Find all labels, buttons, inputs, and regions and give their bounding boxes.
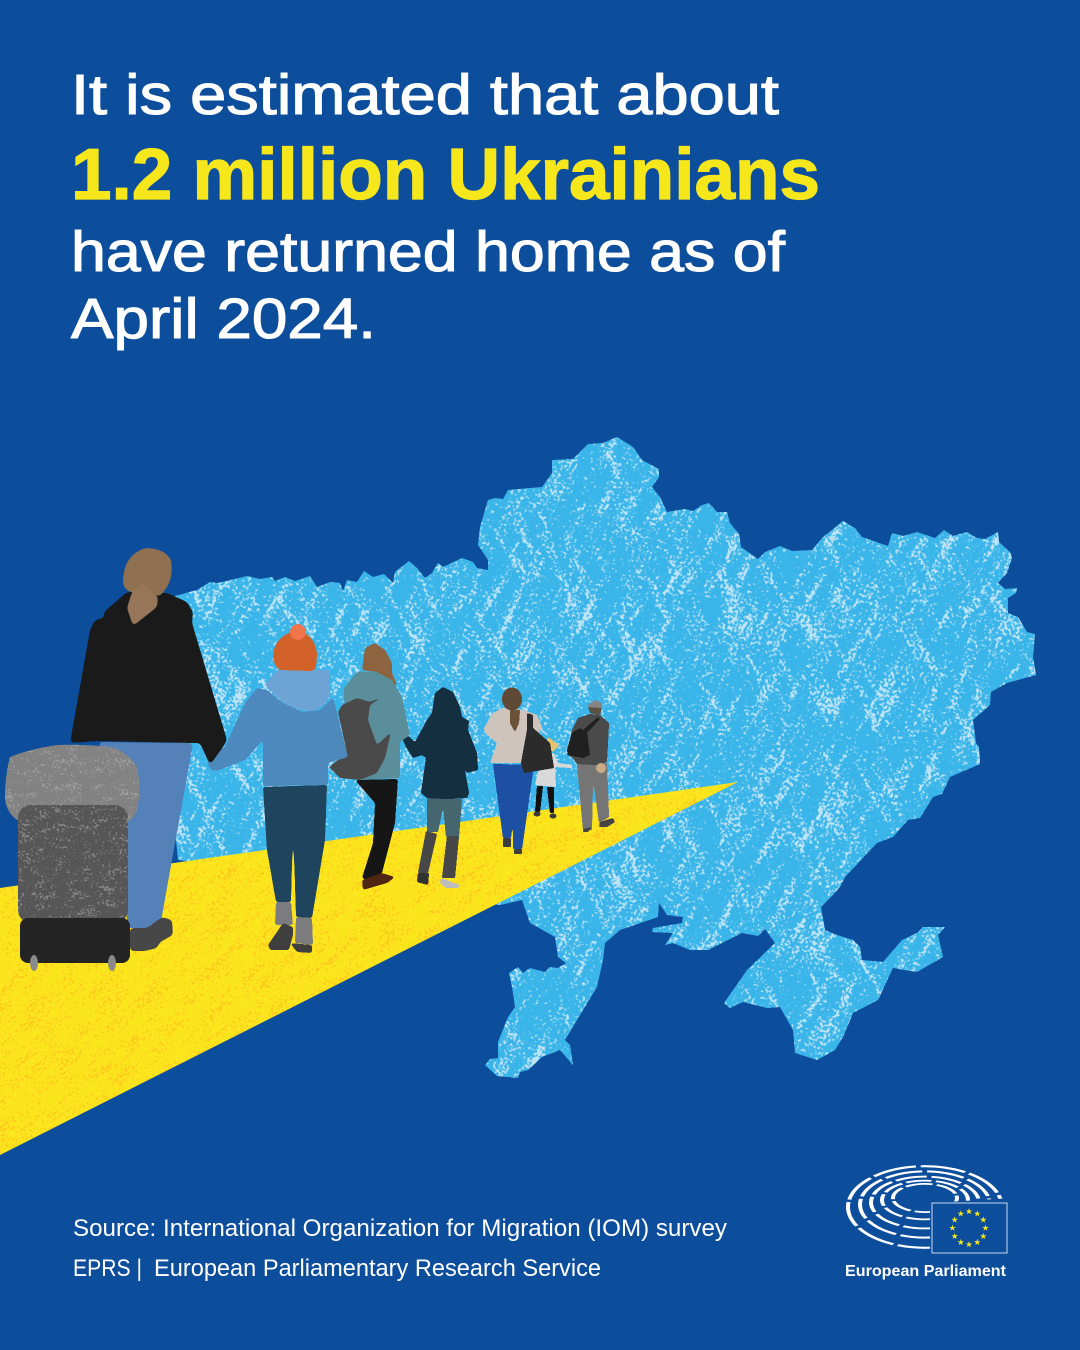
title [71,63,820,351]
child in red hat [208,624,348,953]
heading line 1: It is estimated that about [71,63,779,127]
source line: Source: International Organization for Migration (IOM) survey [73,1215,727,1242]
woman with shoulder bag [484,688,554,854]
logo wordmark: European Parliament [845,1263,1006,1280]
girl in dark coat [402,687,478,888]
heading line 4: April 2024. [71,287,376,351]
map of Ukraine [150,420,1050,1090]
source text [73,1215,727,1282]
people walking [0,548,615,971]
European Parliament logo [845,1166,1012,1280]
hemicycle [848,1166,1012,1256]
woman in black jacket [70,548,227,951]
EPRS label: EPRS | [73,1255,142,1282]
EU flag [932,1203,1007,1253]
heading line 3: have returned home as of [71,220,785,284]
rolling suitcase with bag [0,740,145,971]
yellow path [0,782,738,1155]
small child [534,737,572,818]
woman with backpack [329,643,410,890]
man with crossbody bag [567,700,615,832]
heading highlight: 1.2 million Ukrainians: 1.2 million Ukrainians [71,135,820,215]
EPRS full name: European Parliamentary Research Service [154,1255,601,1282]
